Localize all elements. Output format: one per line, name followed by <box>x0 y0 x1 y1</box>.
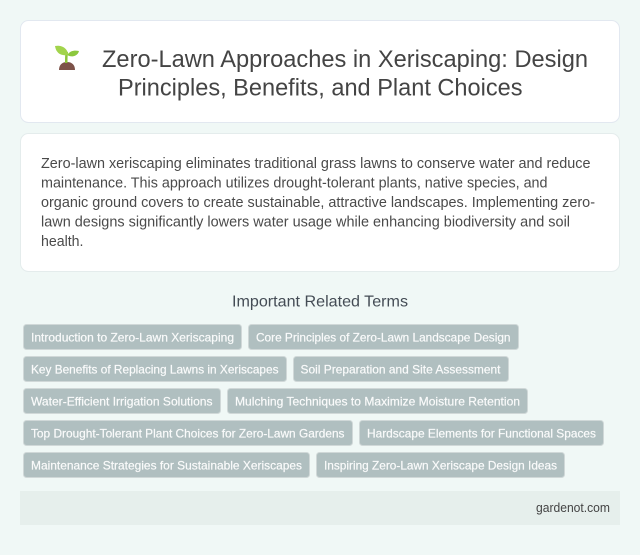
title: Principles, Benefits, and Plant Choices <box>118 74 522 102</box>
panel: title header <box>20 20 620 122</box>
title <box>102 46 588 102</box>
tag <box>294 356 508 382</box>
tag: Mulching Techniques to Maximize Moisture Retention <box>235 394 520 408</box>
icon: sprout <box>55 46 79 70</box>
tag: Top Drought-Tolerant Plant Choices for Zero-Lawn Gardens <box>31 426 344 440</box>
tag <box>24 420 352 446</box>
tag list <box>24 324 604 478</box>
panel: description <box>20 134 620 272</box>
tag <box>24 324 242 350</box>
tag: Hardscape Elements for Functional Spaces <box>367 426 596 440</box>
tag: Introduction to Zero-Lawn Xeriscaping <box>31 330 234 344</box>
description text: organic ground covers to create sustainable, attractive landscapes. Implementing zero- <box>41 195 595 211</box>
footer <box>20 491 620 525</box>
description text <box>41 156 595 250</box>
description text: lawn designs significantly lowers water usage while enhancing biodiversity and soil <box>41 214 570 230</box>
tag <box>24 452 310 478</box>
tag: Key Benefits of Replacing Lawns in Xeriscapes <box>31 362 278 376</box>
tag <box>248 324 518 350</box>
tag <box>24 388 220 414</box>
title: Zero-Lawn Approaches in Xeriscaping: Design <box>102 46 588 73</box>
tag: Core Principles of Zero-Lawn Landscape Design <box>256 330 510 344</box>
tag <box>316 452 564 478</box>
tag: Water-Efficient Irrigation Solutions <box>31 394 213 408</box>
description text: maintenance. This approach utilizes drought-tolerant plants, native species, and <box>41 176 548 192</box>
tag: Inspiring Zero-Lawn Xeriscape Design Ideas <box>324 458 557 472</box>
tag <box>24 356 286 382</box>
description text: Zero-lawn xeriscaping eliminates traditional grass lawns to conserve water and reduce <box>41 156 590 172</box>
footer: gardenot.com <box>536 501 610 515</box>
tag <box>228 388 528 414</box>
tag: Soil Preparation and Site Assessment <box>300 362 501 376</box>
tag: Maintenance Strategies for Sustainable Xeriscapes <box>31 458 302 472</box>
description text: health. <box>41 234 84 250</box>
tag <box>360 420 604 446</box>
heading: important related terms: Important Related Terms <box>232 294 408 310</box>
